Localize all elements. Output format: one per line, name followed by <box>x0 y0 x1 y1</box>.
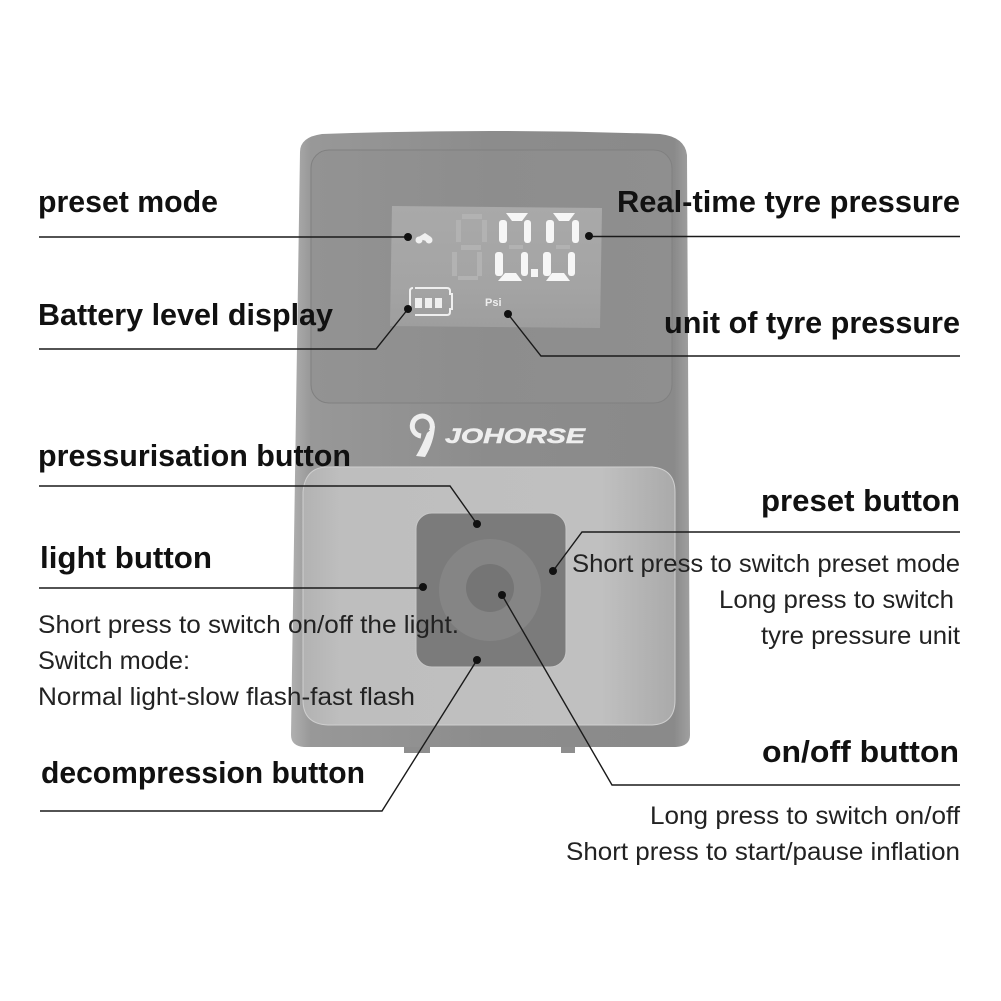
brand logo <box>412 416 586 457</box>
heading: on/off button: on/off button <box>762 734 959 769</box>
text block: on/off button description: Long press to switch on/off <box>650 802 960 830</box>
device: air pump body <box>291 131 690 753</box>
callout: real-time pressure <box>585 232 960 240</box>
heading: unit of tyre pressure: unit of tyre pressure <box>664 305 960 340</box>
logo wordmark: JOHORSE <box>445 425 586 448</box>
lcd display <box>390 206 602 328</box>
callout: decompression button <box>40 656 481 811</box>
text block: light button description <box>38 611 459 711</box>
callout: light button <box>39 583 427 591</box>
bottom feet <box>404 747 575 753</box>
logo mark <box>412 416 435 457</box>
text block: light button description: Switch mode: <box>38 647 190 675</box>
unit label: Psi <box>485 297 502 309</box>
lcd digits 0.0 over 0.0 <box>495 213 579 281</box>
text block: preset button description <box>572 550 960 650</box>
heading: light button: light button <box>40 540 212 575</box>
callout: preset button <box>549 532 960 575</box>
button pad <box>416 513 566 667</box>
text block: on/off button description: Short press to start/pause inflation <box>566 838 960 866</box>
bike mode icon <box>416 233 432 244</box>
dim lcd segments <box>452 214 570 280</box>
heading: decompression button: decompression button <box>41 755 365 790</box>
heading: real-time tyre pressure: Real-time tyre pressure <box>617 184 960 219</box>
device shell <box>291 131 690 747</box>
text block: preset button description: tyre pressure unit <box>761 622 960 650</box>
callout: on/off button <box>498 591 960 785</box>
silver control panel <box>303 467 675 725</box>
callout: unit <box>504 310 960 356</box>
callout: preset mode <box>39 233 412 241</box>
outer dial <box>439 539 541 641</box>
callout: battery level <box>39 305 412 349</box>
text block: preset button description: Short press to switch preset mode <box>572 550 960 578</box>
screen panel <box>311 150 672 403</box>
callout: pressurisation button <box>39 486 481 528</box>
heading: preset button: preset button <box>761 483 960 518</box>
heading: preset mode: preset mode <box>38 184 218 219</box>
text block: preset button description: Long press to switch <box>719 586 954 614</box>
battery icon <box>410 288 452 315</box>
text block: on/off button description <box>566 802 960 866</box>
centre on/off button <box>466 564 514 612</box>
text block: light button description: Short press to switch on/off the light. <box>38 611 459 639</box>
callout lines and dots <box>39 232 960 811</box>
heading: battery level display: Battery level display <box>38 297 334 332</box>
text block: light button description: Normal light-slow flash-fast flash <box>38 683 415 711</box>
heading: pressurisation button: pressurisation button <box>38 438 351 473</box>
